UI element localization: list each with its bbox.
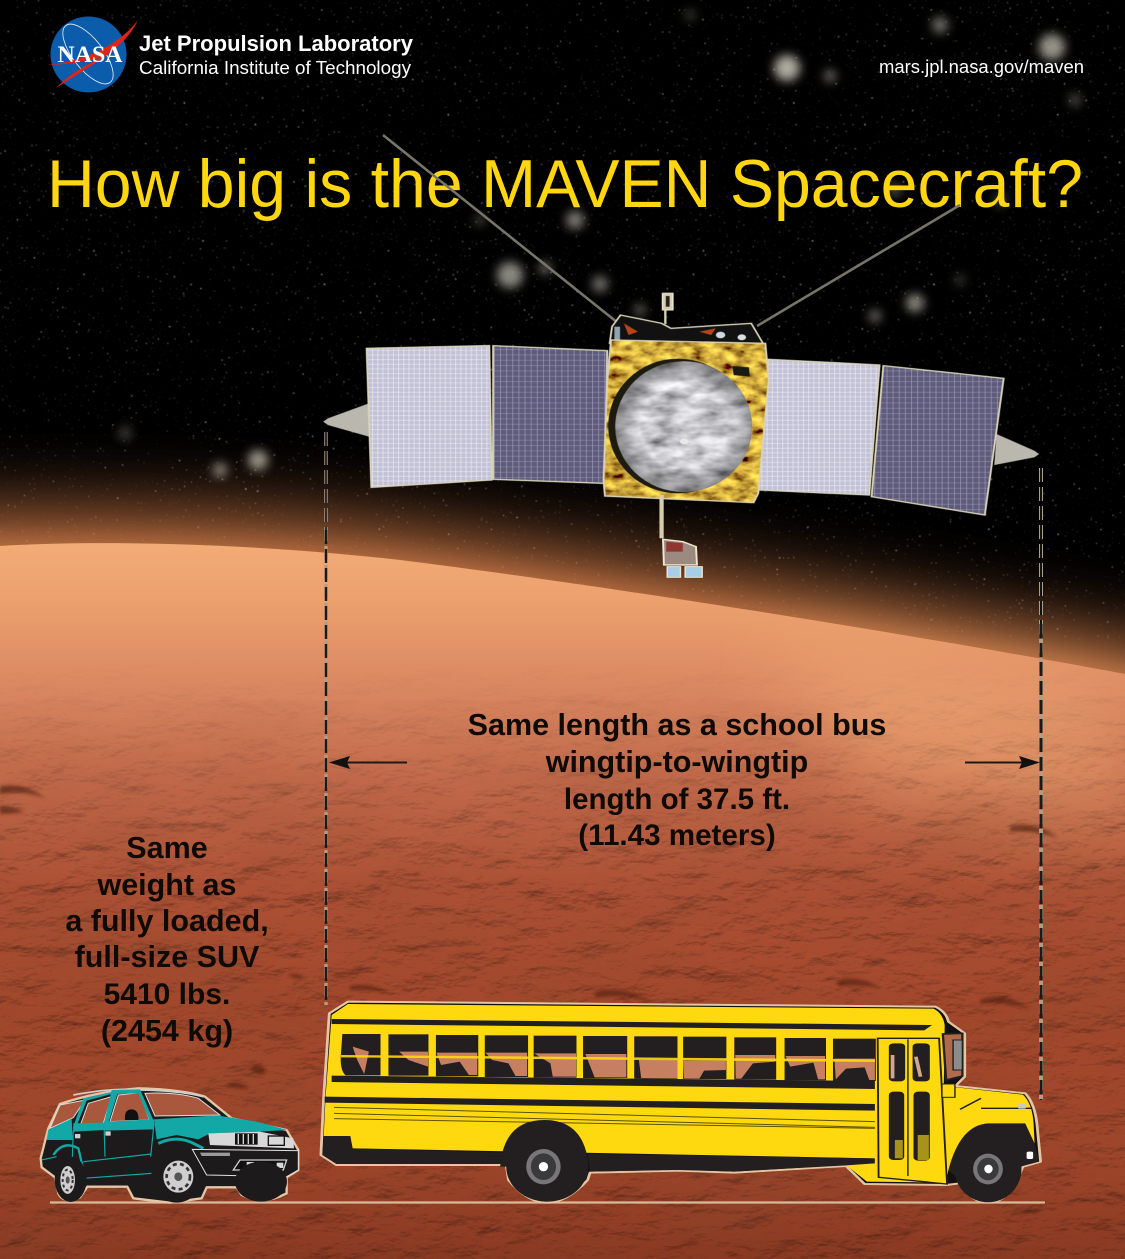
top instrument mast xyxy=(663,293,673,324)
gold thermal blanket body xyxy=(604,340,769,503)
SUV weight caption xyxy=(65,831,269,1048)
sunlit sheen on the right limb xyxy=(760,640,1125,840)
SUV weight caption: 5410 lbs. xyxy=(104,978,230,1011)
SUV weight caption: (2454 kg) xyxy=(101,1014,233,1048)
JPL wordmark: California Institute of Technology xyxy=(139,57,412,78)
front wheel xyxy=(151,1149,202,1203)
top deck xyxy=(610,315,763,343)
bus length caption: wingtip-to-wingtip xyxy=(545,745,808,779)
lower skirt xyxy=(588,1154,875,1172)
SUV weight caption: full-size SUV xyxy=(75,940,260,974)
SUV weight caption: a fully loaded, xyxy=(65,904,269,938)
NASA logo: NASA xyxy=(58,42,123,68)
antenna booms xyxy=(383,135,960,326)
school bus xyxy=(321,1002,1041,1203)
JPL wordmark xyxy=(139,31,413,78)
solar panel outer left xyxy=(367,346,492,487)
dark ground patches xyxy=(928,808,1056,846)
rub rails xyxy=(334,1107,875,1128)
bus length caption: length of 37.5 ft. xyxy=(564,783,790,816)
bus body yellow xyxy=(324,1004,1035,1183)
roof stripe xyxy=(332,1019,932,1030)
atmosphere glow xyxy=(0,517,1125,1000)
bus length caption: Same length as a school bus xyxy=(468,708,886,742)
SUV weight caption: weight as xyxy=(97,868,236,902)
roof rail xyxy=(73,1089,203,1097)
dashed measure line left xyxy=(324,432,328,1005)
title: How big is the MAVEN Spacecraft? xyxy=(47,146,1083,222)
magnetometer tip left xyxy=(323,403,369,437)
door handle front xyxy=(105,1131,111,1136)
front bumper light xyxy=(1027,1152,1033,1159)
SUV xyxy=(41,1088,298,1203)
far side wheel xyxy=(235,1162,287,1202)
side mirror xyxy=(942,1033,962,1097)
craters xyxy=(0,785,1058,1089)
dashed measure line right xyxy=(1039,468,1043,1100)
windows xyxy=(341,1034,876,1081)
website url: mars.jpl.nasa.gov/maven xyxy=(879,56,1084,77)
hood lines xyxy=(960,1098,1032,1109)
teal trim lines xyxy=(42,1123,203,1178)
rear wheel xyxy=(55,1157,87,1202)
terrain relief xyxy=(0,640,1125,1259)
SUV outline and black body xyxy=(41,1088,298,1203)
SUV weight caption: Same xyxy=(126,831,208,865)
high gain antenna dish xyxy=(608,359,752,493)
rear bumper xyxy=(322,1136,506,1164)
solar panel inner right xyxy=(758,359,880,495)
bus outline halo xyxy=(321,1002,1041,1203)
JPL wordmark: Jet Propulsion Laboratory xyxy=(139,31,413,56)
door xyxy=(878,1038,947,1184)
bus length caption xyxy=(468,708,886,852)
solar panel outer right xyxy=(872,366,1004,515)
front bumper xyxy=(192,1149,298,1177)
rear wheel xyxy=(500,1120,589,1202)
bus length caption: (11.43 meters) xyxy=(578,819,776,852)
lower instrument arm xyxy=(662,495,702,577)
solar panel inner left xyxy=(493,346,607,483)
ground line xyxy=(50,1201,1045,1204)
arrow left xyxy=(329,756,407,769)
arrow right xyxy=(965,756,1040,769)
front wheel xyxy=(954,1136,1022,1202)
Mars surface xyxy=(0,543,1125,1259)
window rail stripe xyxy=(332,1076,875,1089)
body outline xyxy=(604,340,769,503)
front wheel arch xyxy=(948,1123,1039,1180)
teal bodywork xyxy=(47,1089,287,1140)
NASA logo xyxy=(47,16,138,92)
headlight xyxy=(1018,1104,1026,1109)
windows xyxy=(50,1093,220,1128)
driver silhouette xyxy=(125,1109,138,1120)
instrument on body xyxy=(732,366,750,377)
door handles xyxy=(75,1134,80,1138)
MAVEN spacecraft xyxy=(323,135,1039,577)
lower stripe xyxy=(325,1097,875,1111)
grille and headlights xyxy=(208,1132,294,1148)
magnetometer tip right xyxy=(994,434,1039,465)
